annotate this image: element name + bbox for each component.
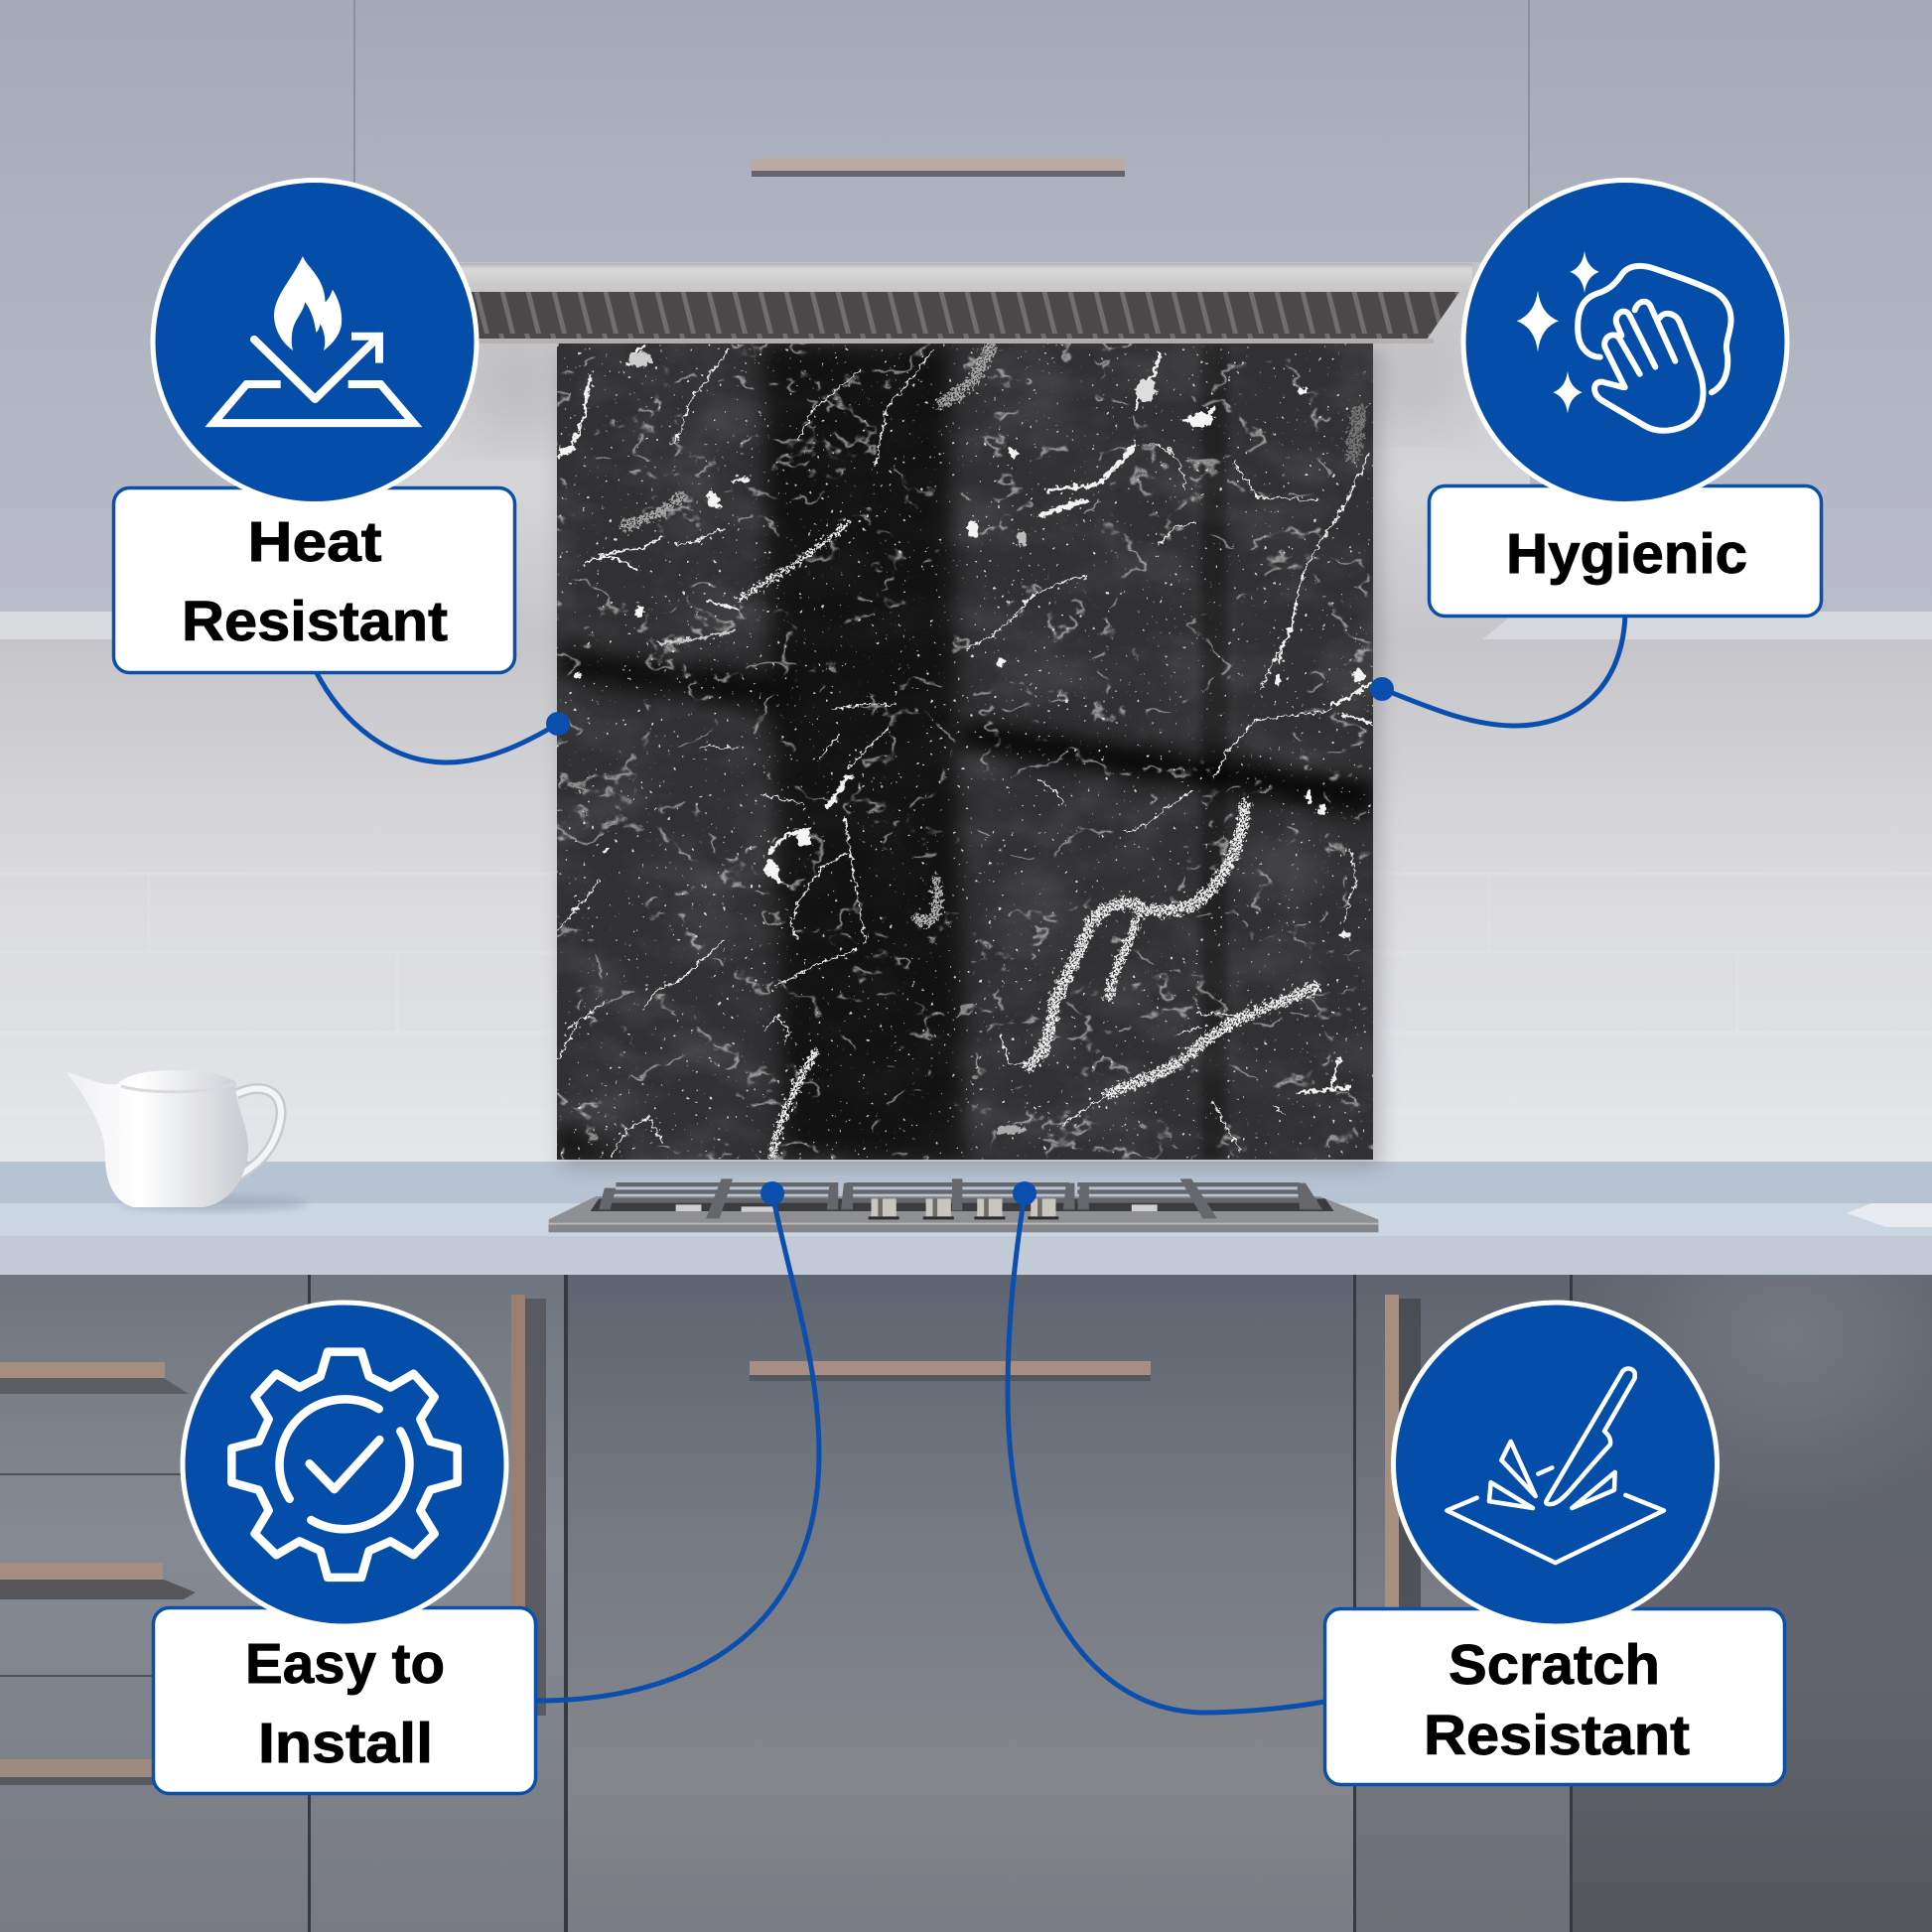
badge: hygienic bbox=[1463, 181, 1787, 504]
label box: easy to install bbox=[153, 1608, 536, 1793]
icon: flame on surface with arrow bbox=[205, 256, 423, 427]
icon: knife scratching a surface bbox=[1445, 1366, 1666, 1565]
label box: scratch resistant bbox=[1324, 1608, 1785, 1785]
reflected shadows bbox=[557, 344, 1373, 1160]
label: heat resistant: Heat bbox=[248, 510, 382, 574]
connector: heat resistant bbox=[315, 669, 570, 762]
connector: easy to install bbox=[537, 1181, 819, 1701]
label: easy to install: Easy to bbox=[245, 1632, 445, 1696]
hob grates bbox=[599, 1178, 1322, 1218]
teapot bbox=[67, 1070, 308, 1211]
panel: black marble splashback bbox=[557, 344, 1380, 1168]
label: heat resistant bbox=[182, 510, 448, 653]
badge: easy to install bbox=[183, 1303, 506, 1626]
icon: hand wiping with sparkles bbox=[1517, 250, 1734, 434]
callout: heat resistant bbox=[113, 181, 514, 673]
callout: easy to install bbox=[153, 1303, 536, 1793]
extractor hood bbox=[460, 263, 1472, 344]
label: scratch resistant: Resistant bbox=[1424, 1704, 1690, 1767]
label: hygienic: Hygienic bbox=[1506, 522, 1747, 586]
label: scratch resistant bbox=[1424, 1633, 1690, 1767]
label: heat resistant: Resistant bbox=[182, 590, 448, 653]
badge: heat resistant bbox=[153, 181, 477, 504]
label: scratch resistant: Scratch bbox=[1449, 1633, 1660, 1697]
hob bbox=[548, 1178, 1378, 1233]
label box: heat resistant bbox=[113, 488, 514, 673]
hob knobs bbox=[869, 1198, 1058, 1219]
badge: scratch resistant bbox=[1394, 1303, 1718, 1626]
upper cabinets bbox=[0, 0, 1932, 639]
connector: hygienic bbox=[1370, 614, 1625, 726]
marble veins bbox=[557, 344, 1373, 1160]
label: easy to install: Install bbox=[258, 1712, 433, 1775]
worktop bbox=[0, 1162, 1932, 1275]
label: easy to install bbox=[245, 1632, 445, 1775]
upper cabinet handle bbox=[752, 158, 1125, 177]
label box: hygienic bbox=[1430, 486, 1821, 616]
lower cabinets bbox=[0, 1275, 1932, 1932]
cabinet handles bbox=[0, 1295, 1421, 1785]
callout: hygienic bbox=[1430, 181, 1821, 616]
connector: scratch resistant bbox=[1008, 1181, 1324, 1713]
callout: scratch resistant bbox=[1324, 1303, 1785, 1785]
icon: gear with check mark bbox=[227, 1347, 462, 1583]
